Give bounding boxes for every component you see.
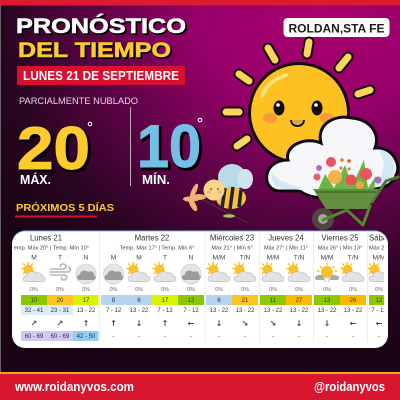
day: Sábado (cut off): 0% — [375, 287, 383, 293]
day: Sábado (cut off): M/M — [373, 254, 385, 262]
day: Martes 22: 6 — [137, 298, 141, 304]
day: Martes 22: M — [111, 254, 116, 262]
day: Martes 22: 17 — [162, 298, 169, 304]
title: DEL TIEMPO — [20, 40, 172, 64]
day: Sábado (cut off): 12 — [376, 298, 383, 304]
day: Jueves 24: ↓ — [296, 319, 302, 328]
day: Lunes 21: ↗ — [31, 319, 37, 328]
day: Viernes 25: 0% — [349, 287, 357, 293]
day: Sábado (cut off): 7 - 12 — [371, 308, 387, 314]
day: Martes 22: Temp. Máx 17° | Temp. Mín 6° — [120, 246, 194, 252]
day: Martes 22: - — [164, 334, 166, 340]
next days heading: PRÓXIMOS 5 DÍAS — [16, 201, 114, 214]
day: Lunes 21: ↗ — [57, 319, 63, 328]
day: Viernes 25: 0% — [323, 287, 331, 293]
day: Lunes 21: 0% — [56, 287, 64, 293]
day: Jueves 24: Jueves 24 — [268, 234, 304, 242]
day: Jueves 24: - — [272, 334, 274, 340]
day: Lunes 21: ↑ — [83, 319, 89, 328]
day: Jueves 24: M/M — [267, 254, 279, 262]
day: Jueves 24: T/N — [294, 254, 305, 262]
day: Jueves 24: 0% — [295, 287, 303, 293]
day: Martes 22: - — [190, 334, 192, 340]
day: Viernes 25: ↓ — [324, 319, 330, 328]
day: Martes 22: 13 — [188, 298, 195, 304]
icon: bee — [203, 164, 253, 223]
icon: sun — [226, 42, 370, 162]
day: Martes 22: 0% — [110, 287, 118, 293]
day: Martes 22: 0% — [161, 287, 169, 293]
day: Miércoles 23: Miércoles 23 — [210, 234, 254, 242]
day: Martes 22: - — [112, 334, 114, 340]
icon: orange flower — [183, 183, 206, 212]
day: Miércoles 23: 6 — [217, 298, 221, 304]
day: Viernes 25: 13 - 22 — [318, 308, 337, 314]
day: Martes 22: 7 - 12 — [157, 308, 173, 314]
day: Jueves 24: 13 - 22 — [290, 308, 309, 314]
max temperature: 20 — [17, 115, 90, 182]
day: Viernes 25: Viernes 25 — [321, 234, 359, 242]
day: Martes 22: ↑ — [162, 319, 168, 328]
day: Lunes 21: 60 - 69 — [51, 334, 70, 340]
day: Miércoles 23: ↓ — [216, 319, 222, 328]
day: Viernes 25: M/M — [321, 254, 333, 262]
day: Viernes 25 — [314, 234, 366, 340]
day: Miércoles 23: T/N — [240, 254, 251, 262]
footer — [0, 372, 400, 400]
day: Martes 22: 0% — [135, 287, 143, 293]
day: Jueves 24: 27 — [296, 298, 303, 304]
day: Martes 22: 7 - 12 — [106, 308, 122, 314]
day: Viernes 25: T/N — [348, 254, 359, 262]
icon: wheelbarrow with flowers — [312, 157, 398, 230]
date banner: LUNES 21 DE SEPTIEMBRE — [23, 69, 179, 83]
max temperature: MÁX. — [20, 172, 51, 187]
location badge: ROLDAN,STA FE — [288, 24, 385, 36]
day: Lunes 21: T — [58, 254, 62, 262]
day: Martes 22: ↓ — [136, 319, 142, 328]
day: Miércoles 23: M/M — [213, 254, 225, 262]
day: Jueves 24: ↘ — [270, 319, 276, 328]
day: Jueves 24: 13 - 22 — [264, 308, 283, 314]
day: Martes 22: 13 - 22 — [130, 308, 149, 314]
icon: cloud — [267, 117, 398, 198]
footer: www.roidanyvos.com — [14, 379, 134, 394]
min temperature: 10 — [139, 115, 203, 182]
day: Sábado (cut off) — [368, 234, 384, 337]
day: Lunes 21: 60 - 69 — [25, 334, 44, 340]
day: Lunes 21: 13 - 22 — [77, 308, 96, 314]
day: Sábado (cut off): Máx 26° — [369, 246, 390, 252]
day: Lunes 21 — [11, 234, 98, 341]
day: Viernes 25: - — [352, 334, 354, 340]
day: Lunes 21: N — [84, 254, 89, 262]
day: Jueves 24: Máx 27° | Mín 11° — [264, 246, 308, 252]
day: Miércoles 23: Máx 21° | Mín 6° — [211, 246, 253, 252]
day: Jueves 24: - — [298, 334, 300, 340]
day: Lunes 21: 0% — [82, 287, 90, 293]
day: Viernes 25: Máx 26° | Mín 13° — [318, 246, 362, 252]
day: Miércoles 23: ↘ — [242, 319, 248, 328]
day: Miércoles 23: 0% — [215, 287, 223, 293]
day: Martes 22: - — [138, 334, 140, 340]
day: Lunes 21: Lunes 21 — [30, 234, 62, 242]
day: Martes 22: N — [189, 254, 194, 262]
day: Viernes 25: - — [326, 334, 328, 340]
day: Martes 22: ↑ — [110, 319, 117, 328]
day: Martes 22: 8 — [112, 298, 116, 304]
day: Lunes 21: 42 - 50 — [77, 334, 96, 340]
day: Viernes 25: 26 — [350, 298, 357, 304]
day: Lunes 21: 32 - 41 — [25, 308, 44, 314]
day: Martes 22: 0% — [187, 287, 195, 293]
day: Viernes 25: ← — [350, 319, 357, 328]
day: Lunes 21: 17 — [83, 298, 90, 304]
day: Lunes 21: 10 — [31, 298, 38, 304]
min temperature: 10 — [137, 113, 201, 180]
day: Miércoles 23: 13 - 22 — [210, 308, 229, 314]
day: Miércoles 23: 13 - 22 — [236, 308, 255, 314]
day: Lunes 21: Temp. Máx 20° | Temp. Mín 10° — [11, 246, 89, 252]
day: Miércoles 23: - — [244, 334, 246, 340]
day: Lunes 21: 0% — [30, 287, 38, 293]
day: Viernes 25: 13 — [324, 298, 331, 304]
min temperature: MÍN. — [142, 172, 170, 187]
footer: @roidanyvos — [314, 379, 385, 394]
day: Martes 22: Martes 22 — [135, 234, 169, 242]
title: PRONÓSTICO — [16, 13, 186, 38]
day: Miércoles 23 — [206, 234, 258, 340]
divider — [130, 107, 131, 186]
day: Sábado (cut off): - — [378, 334, 380, 340]
condition text: PARCIALMENTE NUBLADO — [19, 96, 138, 107]
title — [16, 13, 188, 64]
max temperature: 20 — [19, 117, 92, 184]
day: Martes 22: T — [163, 254, 167, 262]
day: Lunes 21: 20 — [57, 298, 64, 304]
day: Martes 22 — [101, 234, 204, 340]
top red bar — [0, 0, 400, 6]
location badge — [284, 18, 390, 37]
title: PRONÓSTICO — [18, 14, 188, 40]
day: Jueves 24 — [260, 234, 312, 340]
day: Miércoles 23: 0% — [241, 287, 249, 293]
next days heading — [15, 201, 114, 218]
day: Jueves 24: 0% — [269, 287, 277, 293]
day: Martes 22: M — [136, 254, 142, 262]
day: Martes 22: 7 - 12 — [183, 308, 199, 314]
day: Viernes 25: 13 - 22 — [344, 308, 363, 314]
day: Miércoles 23: - — [218, 334, 220, 340]
day: Lunes 21: 23 - 31 — [51, 308, 70, 314]
day: Lunes 21: M — [31, 254, 37, 262]
day: Jueves 24: 11 — [270, 298, 277, 304]
day: Martes 22: ← — [188, 319, 195, 328]
day: Sábado (cut off): ← — [376, 319, 383, 328]
forecast table — [11, 230, 400, 348]
title: DEL TIEMPO — [18, 38, 171, 62]
day: Miércoles 23: 21 — [242, 298, 249, 304]
